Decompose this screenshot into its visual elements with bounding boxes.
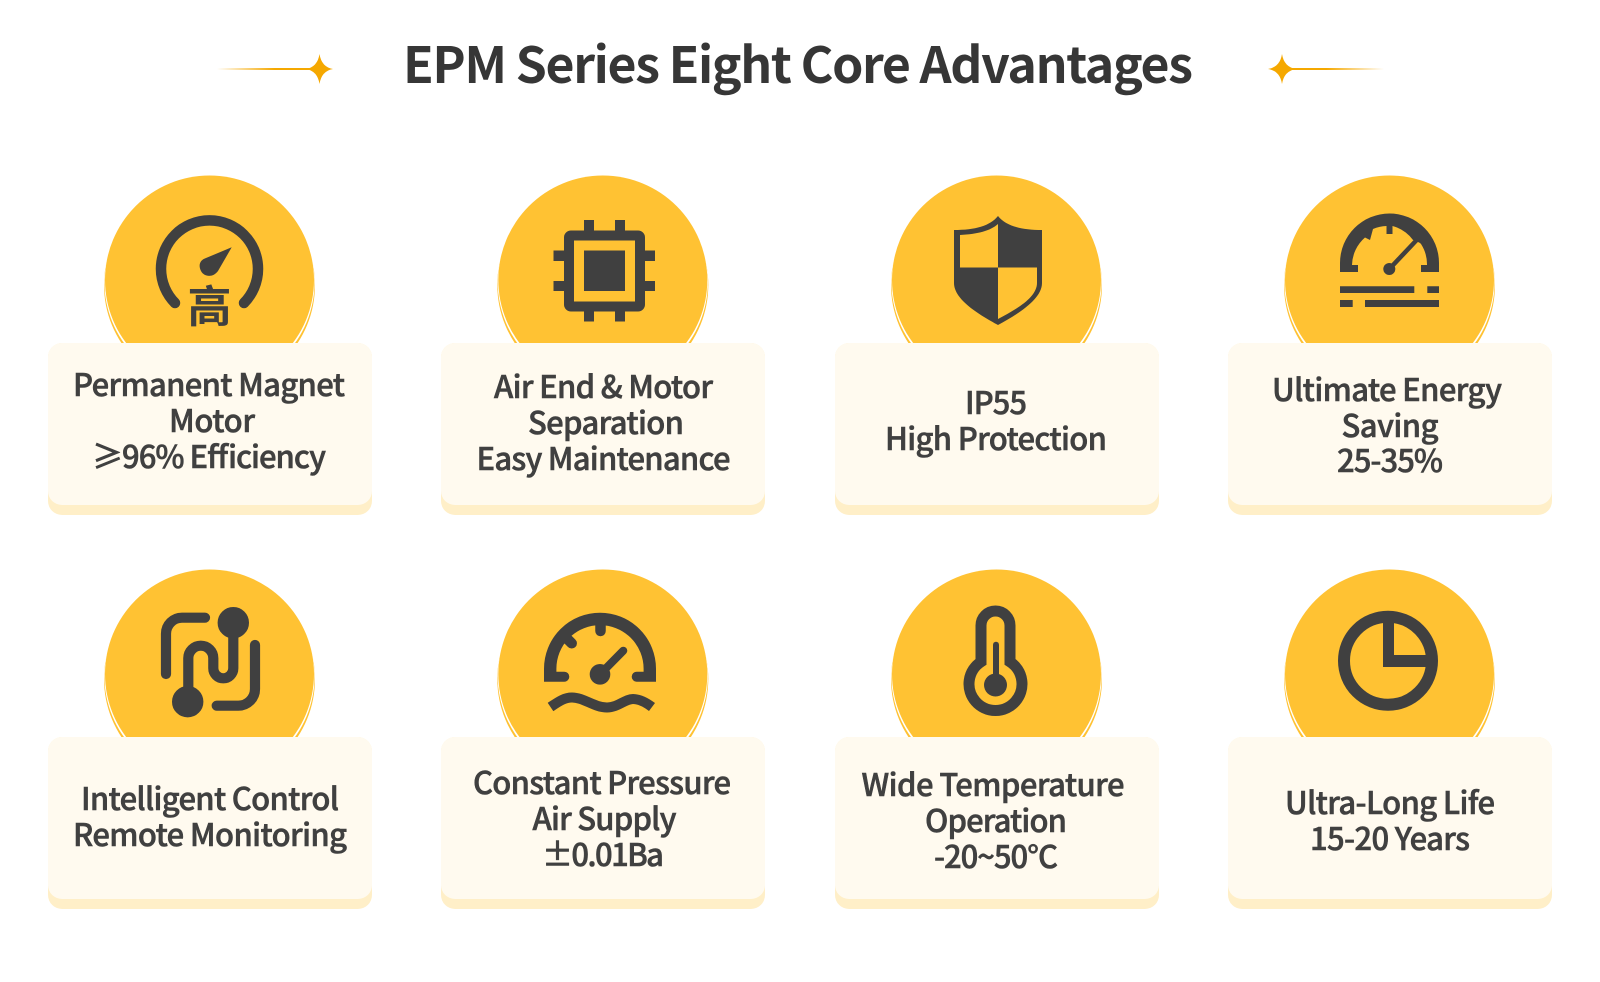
panel: ultra-long life [1228,570,1552,909]
text: IP55: IP55 [965,378,1027,423]
text: constant pressure [473,758,731,875]
icon: chip [554,220,655,322]
icon: speedometer high: 高 [188,271,232,335]
text: wide temperature: Operation [925,796,1067,841]
icon: thermometer [969,611,1022,710]
text: separation: Air End & Motor [494,362,713,407]
text: efficiency: Motor [169,396,255,441]
panel: constant pressure [441,570,765,909]
panel: intelligent control [48,570,372,909]
text: intelligent control: Remote Monitoring [73,810,347,855]
text: energy saving: 25-35% [1337,436,1443,481]
panel: permanent magnet motor [48,176,372,515]
text: ultra-long life [1285,778,1495,859]
text: energy saving: Saving [1342,401,1439,446]
icon: left star with line [217,54,333,84]
icon: speedometer high [161,220,258,335]
icon: right star with line [1268,54,1384,84]
text: ultra-long life: Ultra-Long Life [1285,778,1495,823]
icon: pie clock [1344,615,1433,705]
text: constant pressure: ±0.01Ba [542,830,664,875]
text: efficiency: Permanent Magnet [73,360,345,405]
panel: wide temperature [835,570,1159,909]
text: separation: Separation [528,398,684,443]
text: IP55: High Protection [885,414,1107,459]
text: IP55 [885,378,1107,459]
text: ultra-long life: 15-20 Years [1310,814,1470,859]
panel: IP55 protection [835,176,1159,515]
icon: shield [954,216,1042,325]
text: constant pressure: Air Supply [532,794,677,839]
icon: pressure gauge and wave [544,619,656,708]
panel: energy saving [1228,176,1552,515]
text: energy saving: Ultimate Energy [1272,365,1502,410]
text: separation [476,362,730,479]
text: efficiency [73,360,345,477]
text: intelligent control: Intelligent Control [81,774,339,819]
panel: air end and motor separation [441,176,765,515]
text: wide temperature [862,760,1124,877]
text: separation: Easy Maintenance [476,434,730,479]
icon: gauge with bars [1340,214,1439,307]
text: constant pressure: Constant Pressure [473,758,731,803]
text: efficiency: ≥96% Efficiency [92,432,326,477]
text: energy saving [1272,365,1502,481]
text: wide temperature: -20~50°C [934,832,1058,877]
title: EPM Series Eight Core Advantages [403,26,1193,98]
icon: network paths [166,612,255,712]
text: intelligent control [73,774,347,855]
text: wide temperature: Wide Temperature [862,760,1124,805]
